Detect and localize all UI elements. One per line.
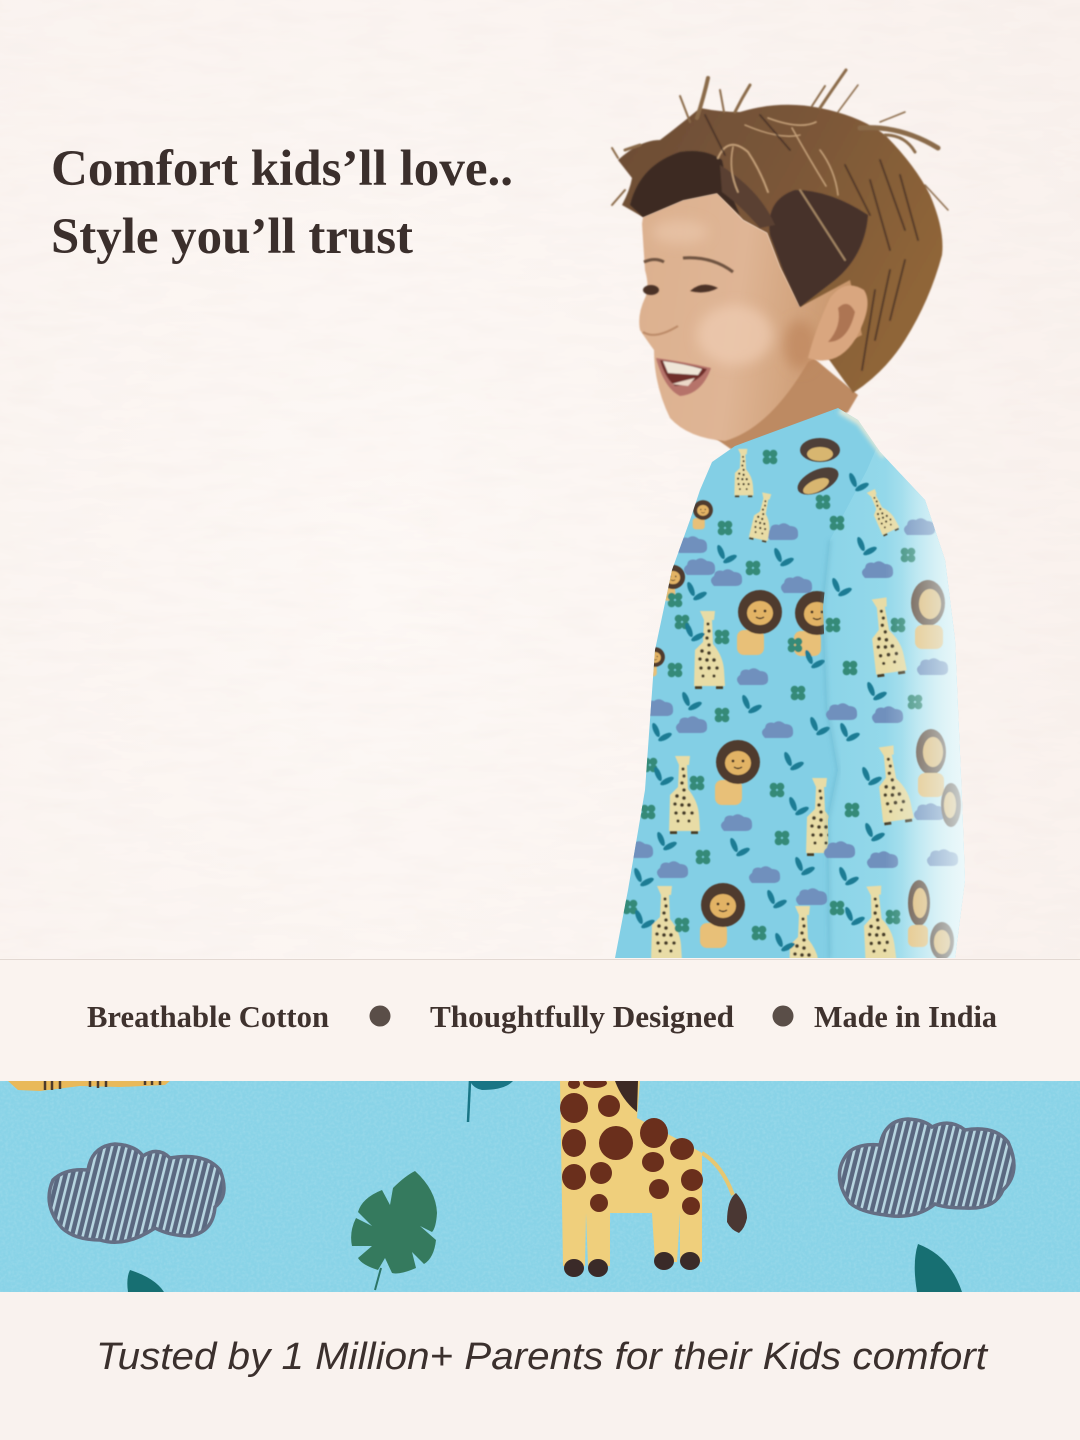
boy face <box>639 193 862 441</box>
kurta body print <box>622 449 839 984</box>
boy eye and brow details <box>643 258 733 335</box>
fabric: teal leaf top <box>468 1081 513 1122</box>
fabric: cloud right <box>839 1119 1014 1216</box>
photo: laughing boy in printed kurta <box>600 70 980 984</box>
kurta sleeve <box>823 440 970 958</box>
boy hair front fringe and strands <box>630 115 918 370</box>
fabric: giraffe <box>560 1078 747 1277</box>
kurta sleeve print <box>793 438 961 965</box>
boy face highlights <box>652 220 816 370</box>
fabric: monstera leaf <box>351 1171 437 1290</box>
fabric: partial yellow animal at top left <box>8 1081 170 1091</box>
fabric: teal leaf bottom right <box>915 1244 962 1292</box>
boy hair back layer <box>612 70 948 393</box>
feature: Made in India: Made in India <box>814 999 997 1034</box>
sleeve seam shadow <box>823 540 838 958</box>
fabric: teal leaf bottom left <box>127 1270 164 1292</box>
title: Comfort kids'll love, Style you'll trust: Style you’ll trust <box>51 209 413 265</box>
boy ear <box>808 286 868 360</box>
separator dot <box>772 1006 794 1026</box>
feature strip <box>0 959 1080 1081</box>
boy kurta <box>615 408 965 958</box>
boy smile <box>656 358 711 396</box>
collar edge highlight <box>840 410 885 456</box>
hair tufts <box>612 70 948 210</box>
boy neck <box>715 355 858 452</box>
footer strip <box>0 1292 1080 1440</box>
fabric close-up band <box>0 1078 1080 1292</box>
feature: Thoughtfully Designed: Thoughtfully Designed <box>430 999 734 1034</box>
title: Comfort kids'll love, Style you'll trust: Comfort kids’ll love.. <box>51 141 513 197</box>
trust tagline: Tusted by 1 Million+ Parents for their Kids comfort <box>96 1336 989 1378</box>
feature: Breathable Cotton: Breathable Cotton <box>87 999 329 1034</box>
separator dot <box>370 1006 390 1026</box>
fabric: cloud left <box>49 1144 224 1242</box>
title: Comfort kids'll love, Style you'll trust <box>51 141 513 265</box>
